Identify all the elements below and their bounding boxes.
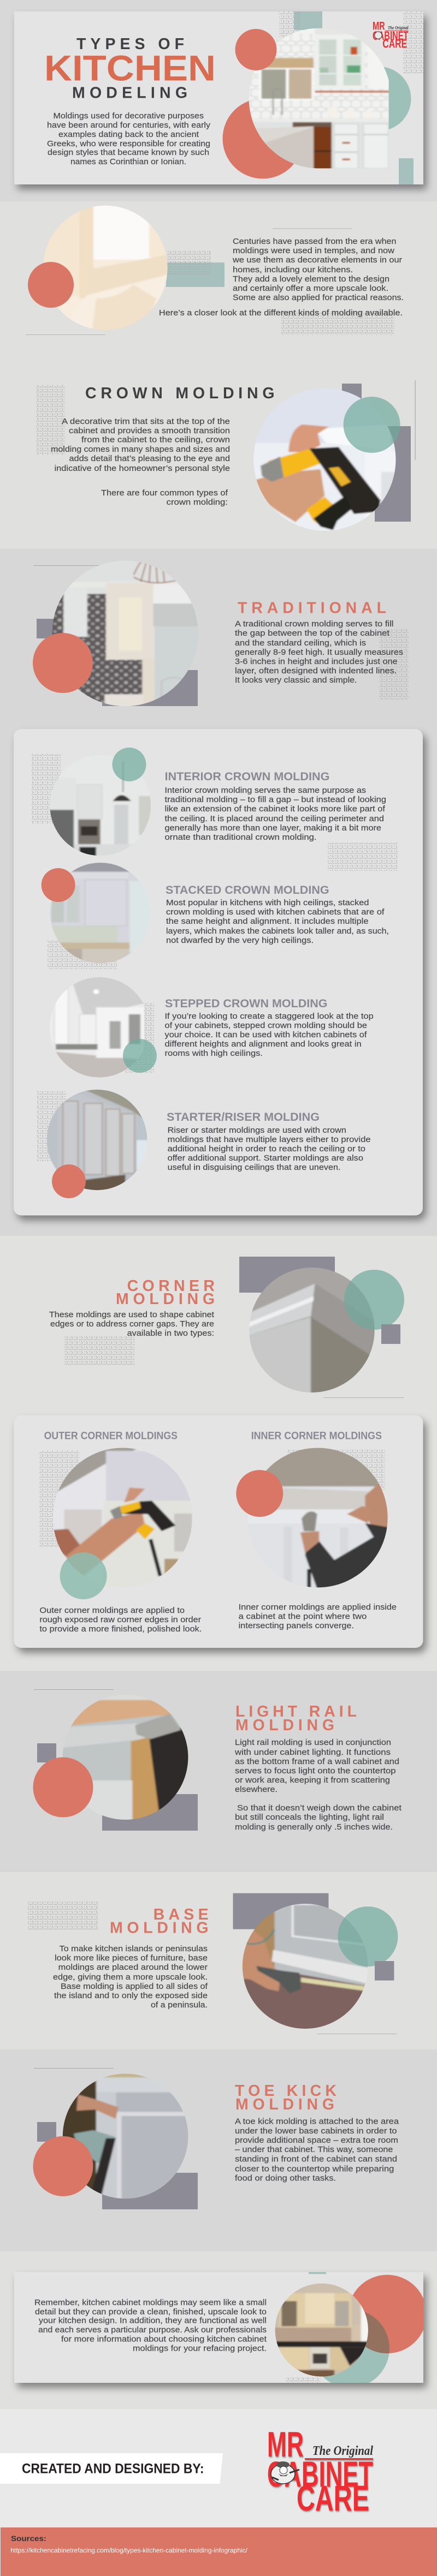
panel: crown molding — [36, 380, 416, 535]
body text: a cabinet at the point where two — [239, 1612, 367, 1621]
title — [44, 35, 216, 102]
panel: hero card — [14, 11, 423, 184]
gray small block — [375, 1961, 394, 1981]
body text: to provide a more finished, polished look. — [39, 1625, 202, 1634]
body text: provide additional space – extra toe room — [235, 2136, 398, 2145]
gray block — [233, 1893, 329, 1929]
body text: generally 8-9 feet high. It usually measures — [235, 648, 403, 657]
body text: So that it doesn’t weigh down the cabinet — [237, 1804, 401, 1813]
body text: indicative of the homeowner’s personal style — [55, 464, 230, 473]
texture swatch — [48, 940, 117, 969]
gray blocks — [37, 1743, 198, 1831]
intro text: have been around for centuries, with early — [47, 121, 211, 130]
sources label: Sources: — [11, 2534, 46, 2543]
texture swatch — [287, 1450, 385, 1490]
texture swatch — [380, 629, 409, 700]
texture swatch — [39, 1450, 79, 1547]
type: starter riser molding — [37, 1087, 371, 1198]
teal translucent circle — [123, 1039, 157, 1073]
body text: serves to focus light onto the countertop — [235, 1767, 395, 1776]
photo: stacked cabinets — [50, 863, 139, 964]
teal tab — [309, 2272, 326, 2274]
body text: These moldings are used to shape cabinet — [49, 1311, 214, 1319]
body text: of a peninsula. — [151, 2001, 208, 2010]
heading: STEPPED CROWN MOLDING — [165, 997, 328, 1010]
heading: BASE — [153, 1906, 209, 1923]
coral circle — [236, 1470, 283, 1517]
texture swatch lower — [281, 311, 394, 335]
intro text: names as Corinthian or Ionian. — [70, 158, 186, 166]
closing text: and each serves a particular purpose. Ask our professionals — [38, 2326, 267, 2334]
body text: useful in disguising ceilings that are uneven. — [168, 1163, 341, 1172]
body text: homes, including our kitchens. — [233, 266, 353, 274]
divider bottom — [26, 334, 105, 335]
body text — [49, 1311, 214, 1338]
logo: Mr. Cabinet Care: CARE — [297, 2478, 369, 2518]
teal translucent circle — [338, 1906, 398, 1967]
type: interior crown molding — [32, 748, 398, 871]
heading: LIGHT RAIL — [235, 1703, 357, 1720]
closing text — [34, 2298, 267, 2353]
gray small block — [381, 1324, 400, 1344]
body text: intersecting panels converge. — [239, 1622, 354, 1630]
photo: light rail — [62, 1699, 188, 1820]
heading: MOLDING — [110, 1919, 209, 1937]
body text: as the bottom frame of a wall cabinet and — [235, 1758, 399, 1766]
body text: cabinet and provides a smooth transition — [69, 427, 230, 435]
texture swatch — [32, 754, 61, 824]
closing text: Remember, kitchen cabinet moldings may seem like a small — [34, 2298, 267, 2307]
body text: adds detail that’s pleasing to the eye and — [69, 455, 230, 463]
body text: available in two types: — [127, 1329, 214, 1338]
body text: edge, giving them a more upscale look. — [53, 1973, 208, 1982]
heading: INTERIOR CROWN MOLDING — [165, 770, 330, 783]
logo: Mr. Cabinet Care small: The Original — [388, 26, 409, 31]
body text — [235, 2118, 399, 2183]
divider — [33, 565, 113, 566]
texture swatch — [286, 2377, 321, 2383]
texture swatch top — [279, 11, 301, 38]
intro text: examples dating back to the ancient — [58, 130, 199, 139]
body text: your choice. It can be used with kitchen cabinets of — [165, 1031, 367, 1039]
photo: man at cabinet — [265, 1448, 388, 1588]
body text — [235, 620, 403, 685]
coral circle — [33, 2136, 93, 2196]
coral circle — [28, 262, 74, 308]
body text: and the standard ceiling, which is — [235, 639, 366, 648]
divider vertical — [415, 380, 416, 460]
body text: A toe kick molding is attached to the area — [235, 2118, 399, 2126]
type: stepped crown molding — [46, 974, 374, 1081]
body text: standing in front of the cabinet can stand — [235, 2155, 397, 2164]
decorative teal block top — [294, 11, 322, 30]
logo: Mr. Cabinet Care: CABINET — [267, 2454, 373, 2494]
heading: STARTER/RISER MOLDING — [167, 1111, 320, 1123]
teal circle right — [346, 67, 411, 131]
body text: moldings were used in temples, and now — [233, 247, 395, 255]
body text — [39, 1606, 202, 1634]
type: stacked crown molding — [42, 859, 389, 969]
panel: sources — [1, 2527, 437, 2576]
body text: the ceiling. It is placed around the ceiling perimeter and — [165, 815, 384, 823]
photo: nail gun — [250, 385, 400, 535]
panel: history — [26, 202, 404, 335]
divider — [34, 2068, 114, 2069]
body text: additional height in order to reach the ceiling or to — [168, 1145, 365, 1153]
body text: Interior crown molding serves the same purpose as — [165, 786, 366, 795]
banner — [0, 2453, 223, 2484]
heading — [110, 1906, 209, 1937]
body text: – under that cabinet. This way, someone — [235, 2145, 393, 2154]
body text: crown molding: — [167, 498, 228, 507]
closing text: moldings for your refacing project. — [133, 2344, 267, 2353]
logo: Mr. Cabinet Care: The Original — [312, 2444, 373, 2458]
body text: molding is generally only .5 inches wide. — [235, 1823, 393, 1832]
teal block bottom right — [399, 158, 414, 184]
body text: generally has more than one layer, making it a bit more — [165, 824, 381, 833]
coral circle — [42, 868, 75, 902]
photo: interior kitchen — [50, 762, 151, 856]
heading: MOLDING — [235, 2096, 334, 2113]
body text: A decorative trim that sits at the top of the — [62, 417, 230, 426]
credit text: CREATED AND DESIGNED BY: — [22, 2461, 204, 2477]
coral circle — [52, 1164, 86, 1198]
body text: moldings that have multiple layers either to provide — [168, 1135, 371, 1144]
body text: or work area, keeping it from scattering — [235, 1776, 390, 1785]
teal translucent circle — [60, 1552, 107, 1599]
body text: the island and to only the exposed side — [54, 1992, 208, 2000]
circles — [322, 2275, 423, 2383]
body text: look more like pieces of furniture, base — [55, 1954, 208, 1963]
body text: 3-6 inches in height and includes just one — [235, 658, 398, 666]
heading — [116, 1277, 215, 1308]
intro text: design styles that became known by such — [48, 148, 209, 157]
body text: molding comes in many shapes and sizes and — [51, 445, 230, 454]
body text — [239, 1603, 397, 1630]
heading: TRADITIONAL — [238, 599, 386, 617]
body text: of your cabinets, stepped crown molding should be — [165, 1021, 367, 1030]
body text: Outer corner moldings are applied to — [39, 1606, 185, 1615]
heading: OUTER CORNER MOLDINGS — [44, 1430, 178, 1442]
photo: riser cabinets — [47, 1089, 147, 1191]
gray blocks — [37, 619, 198, 706]
body text: Most popular in kitchens with high ceilings, stacked — [166, 899, 369, 907]
body text: ornate than traditional crown molding. — [165, 833, 317, 842]
coral circle — [33, 633, 93, 693]
photo: kitchen with cabinet — [49, 558, 202, 709]
gray blocks — [37, 2122, 198, 2209]
texture swatch — [125, 1003, 154, 1073]
photo: stepped cabinets — [55, 977, 144, 1077]
body text: Here’s a closer look at the different kinds of molding available. — [159, 309, 403, 318]
body text: layer, often designed with indented lines. — [235, 667, 397, 676]
body text: traditional molding – to fill a gap – but instead of looking — [165, 796, 386, 804]
body text: we use them as decorative elements in our — [232, 256, 402, 265]
divider — [34, 1689, 114, 1690]
heading: STACKED CROWN MOLDING — [166, 884, 329, 896]
panel: corner moldings card — [14, 1415, 423, 1648]
body text: Riser or starter moldings are used with crown — [168, 1126, 346, 1135]
body text: There are four common types of — [101, 489, 228, 498]
closing text: for more information about choosing kitchen cabinet — [61, 2335, 267, 2344]
body text: elsewhere. — [235, 1785, 277, 1794]
teal translucent circle — [344, 1270, 404, 1330]
divider top — [273, 228, 352, 229]
logo: Mr. Cabinet Care small: CARE — [382, 37, 407, 51]
heading: MOLDING — [116, 1290, 215, 1308]
body text: Some are also applied for practical reasons. — [233, 294, 404, 302]
body text: Light rail molding is used in conjunction — [235, 1738, 391, 1747]
heading: CORNER — [127, 1277, 215, 1295]
logo: Mr. Cabinet Care small — [373, 19, 409, 51]
body text: with under cabinet lighting. It functions — [234, 1748, 391, 1757]
heading — [235, 1703, 357, 1734]
body text: Base molding is applied to all sides of — [61, 1982, 208, 1991]
body text: closer to the countertop while preparing — [235, 2165, 394, 2173]
panel: base molding — [28, 1893, 398, 2034]
texture swatch — [64, 1336, 134, 1365]
body text: To make kitchen islands or peninsulas — [60, 1945, 208, 1953]
texture swatch right — [403, 11, 423, 74]
body text: under the lower base cabinets in order to — [235, 2127, 397, 2136]
body text: rough exposed raw corner edges in order — [39, 1616, 201, 1624]
body text — [51, 417, 230, 507]
intro text — [47, 112, 211, 166]
texture swatch — [167, 250, 211, 274]
body text: offer additional support. Starter moldings are also — [168, 1154, 363, 1163]
body text: It looks very classic and simple. — [235, 676, 357, 685]
body text — [53, 1945, 208, 2010]
texture swatch — [36, 385, 65, 455]
body text: the same height and alignment. It includes multiple — [166, 917, 368, 926]
teal translucent circle — [113, 748, 146, 781]
photo: base molding — [243, 1904, 368, 2029]
photo: man with nailer — [53, 1448, 192, 1577]
body text — [168, 1126, 371, 1172]
body text: crown molding is used with kitchen cabinets that are of — [166, 908, 385, 917]
heading: TOE KICK — [235, 2082, 336, 2100]
gray blocks — [342, 384, 411, 522]
teal translucent circle — [344, 397, 400, 453]
teal block — [166, 262, 225, 287]
icon: mascot — [271, 2461, 299, 2484]
coral circle top — [235, 29, 276, 70]
closing text: your kitchen design. In addition, they are functional as well — [39, 2317, 267, 2326]
divider — [323, 1397, 404, 1398]
body text — [165, 1012, 374, 1058]
body text: moldings are placed around the lower — [58, 1963, 208, 1972]
panel: footer credit — [0, 2424, 373, 2518]
body text: but still conceals the lighting, light rail — [235, 1813, 384, 1822]
body text: not dwarfed by the very high ceilings. — [166, 936, 314, 945]
body text: If you’re looking to create a staggered look at the top — [165, 1012, 374, 1021]
heading: INNER CORNER MOLDINGS — [251, 1430, 382, 1442]
panel: traditional — [33, 558, 409, 709]
body text: A traditional crown molding serves to fill — [235, 620, 393, 629]
body text: layers, which makes the cabinets look taller and, as such, — [166, 927, 389, 936]
body text: from the cabinet to the ceiling, crown — [81, 436, 230, 445]
closing text: detail but they can provide a clean, finished, upscale look to — [35, 2308, 267, 2317]
panel: crown molding types card — [14, 729, 423, 1216]
logo: Mr. Cabinet Care — [267, 2424, 373, 2518]
texture swatch — [28, 1902, 98, 1930]
photo: ornate molding — [44, 205, 168, 330]
texture swatch right — [328, 842, 398, 871]
body text: They add a lovely element to the design — [233, 275, 389, 284]
body text — [159, 237, 404, 318]
body text: rooms with high ceilings. — [165, 1049, 263, 1058]
body text: Centuries have passed from the era when — [233, 237, 397, 246]
body text: food or doing other tasks. — [235, 2174, 336, 2183]
body text — [166, 899, 389, 945]
column: outer corner moldings — [39, 1430, 202, 1634]
title: TYPES OF — [76, 35, 184, 53]
body text: edges or to address corner gaps. They are — [50, 1320, 214, 1329]
logo: Mr. Cabinet Care: MR — [267, 2424, 304, 2464]
logo: Mr. Cabinet Care small: MR — [373, 19, 385, 33]
title: KITCHEN — [44, 47, 216, 88]
body text — [234, 1738, 401, 1832]
heading: MOLDING — [235, 1717, 334, 1734]
texture swatch — [37, 1091, 66, 1162]
source url: https://kitchencabinetrefacing.com/blog/types-kitchen-cabinet-molding-infographic/ — [10, 2547, 248, 2554]
heading — [235, 2082, 336, 2113]
coral circle large — [223, 98, 303, 179]
coral circle — [33, 1757, 93, 1817]
heading: CROWN MOLDING — [85, 385, 274, 402]
body text: different heights and alignment and looks great in — [165, 1040, 362, 1049]
body text: Inner corner moldings are applied inside — [239, 1603, 397, 1612]
body text: and certainly offer a more upscale look. — [233, 284, 388, 293]
photo: toe kick — [62, 2073, 188, 2199]
panel: toe kick molding — [33, 2068, 399, 2209]
panel: light rail molding — [33, 1689, 401, 1832]
title: MODELING — [72, 85, 187, 102]
body text: like an extension of the cabinet it looks more like part of — [165, 805, 386, 814]
intro text: Moldings used for decorative purposes — [54, 112, 204, 121]
panel: conclusion card — [14, 2272, 427, 2388]
photo: cream kitchen — [275, 2283, 368, 2377]
body text — [165, 786, 386, 842]
panel: corner molding — [49, 1257, 404, 1398]
intro text: Greeks, who were responsible for creating — [47, 140, 210, 148]
photo: corner molding — [249, 1268, 375, 1392]
gray block — [239, 1257, 335, 1293]
photo: kitchen — [249, 28, 389, 168]
logo: Mr. Cabinet Care small: CABINET — [373, 29, 409, 43]
column: inner corner moldings — [236, 1430, 397, 1630]
body text: the gap between the top of the cabinet — [235, 629, 389, 638]
